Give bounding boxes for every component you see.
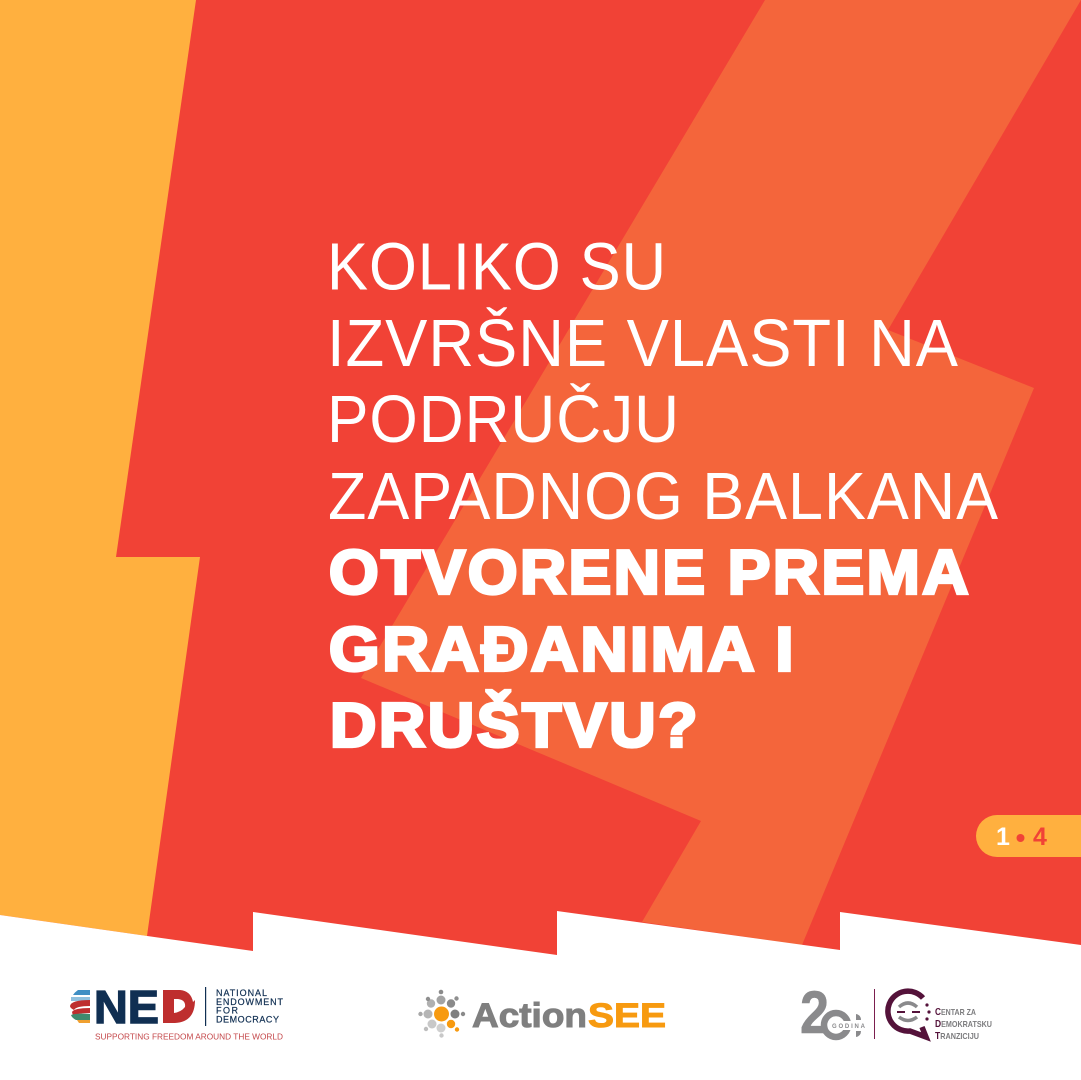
NED divider xyxy=(205,987,206,1026)
NED D counter xyxy=(174,999,185,1013)
title: regular lines: KOLIKO SU xyxy=(327,230,667,304)
NED letters: NE xyxy=(94,981,159,1033)
background: orange quotation shape xyxy=(361,0,1081,945)
NED tagline: SUPPORTING FREEDOM AROUND THE WORLD xyxy=(95,1032,283,1042)
ActionSEE wordmark: Action xyxy=(472,997,587,1035)
CDT divider xyxy=(874,989,875,1039)
logo: Centar za demokratsku tranziciju xyxy=(888,991,992,1042)
white stepped footer band xyxy=(0,911,1081,1080)
CDT name: DEMOKRATSKU xyxy=(935,1019,992,1030)
title: regular lines: ZAPADNOG BALKANA xyxy=(328,460,999,534)
title: regular lines xyxy=(327,230,999,534)
page number total: 4 xyxy=(1033,823,1047,851)
numeral 2: 2 xyxy=(800,979,829,1046)
NED name: ENDOWMENT xyxy=(216,997,284,1007)
godina text: GODINA xyxy=(832,1024,867,1030)
title: regular lines: PODRUČJU xyxy=(327,383,680,457)
NED name: NATIONAL xyxy=(216,988,267,998)
ActionSEE accent word: SEE xyxy=(588,997,666,1035)
title: bold lines: GRAĐANIMA I xyxy=(329,614,796,684)
NED name xyxy=(216,988,284,1024)
CDT name: CENTAR ZA xyxy=(935,1007,976,1018)
background: yellow stepped shape xyxy=(0,0,200,936)
numeral 0 ring xyxy=(824,1013,848,1037)
logo: 20 godina xyxy=(800,979,867,1046)
ActionSEE dots icon xyxy=(418,990,465,1038)
title: bold lines: OTVORENE PREMA xyxy=(329,537,971,607)
CDT name xyxy=(935,1007,992,1042)
title: bold lines: DRUŠTVU? xyxy=(330,689,700,760)
page badge xyxy=(976,815,1081,857)
page number current: 1 xyxy=(996,823,1010,851)
godina label backing xyxy=(831,1021,863,1030)
title: regular lines: IZVRŠNE VLASTI NA xyxy=(327,307,959,381)
NED red D xyxy=(163,990,195,1023)
title: bold lines xyxy=(329,537,971,760)
logo: ActionSEE xyxy=(418,990,666,1038)
CDT speech ring icon xyxy=(888,991,931,1037)
logo: NED xyxy=(70,981,284,1042)
CDT name: TRANZICIJU xyxy=(935,1031,979,1042)
NED globe icon xyxy=(70,990,90,1023)
NED name: FOR xyxy=(216,1006,238,1016)
year accent xyxy=(856,1014,861,1037)
NED name: DEMOCRACY xyxy=(216,1014,279,1024)
page dot xyxy=(1016,834,1024,842)
